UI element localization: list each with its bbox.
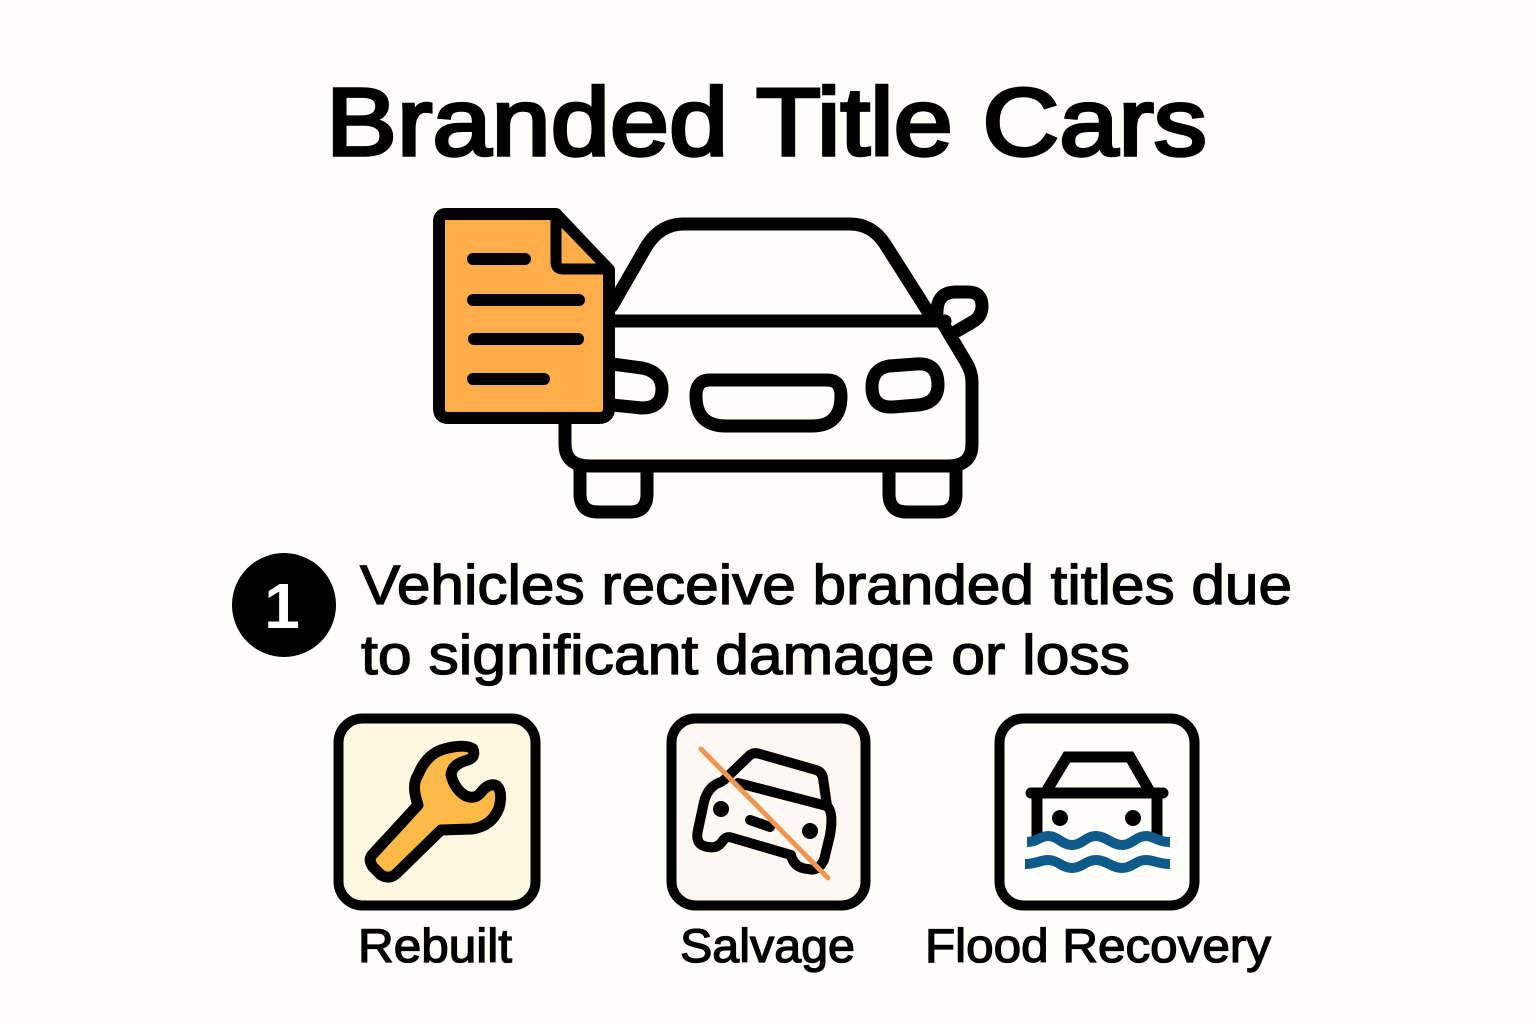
label: rebuilt: Rebuilt [358,919,512,972]
illustration: car with title document [439,214,982,512]
label: salvage: Salvage [680,919,855,972]
icon frame: flood recovery [1000,718,1194,906]
icon: car front view [565,224,982,512]
wheels [580,468,647,512]
step number badge [232,553,336,657]
panel: rebuilt [338,718,536,972]
icon frame: rebuilt [338,718,536,906]
mirror [937,292,982,331]
label: flood recovery: Flood Recovery [925,919,1272,972]
description text: Vehicles receive branded titles due [360,553,1292,616]
water waves [1025,836,1170,868]
panel: flood recovery [925,718,1272,972]
orange strike-through [701,749,828,878]
title: Branded Title Cars [326,69,1207,176]
description text [360,553,1292,686]
grille [696,380,841,426]
wrecked car headlights [713,801,818,839]
step number badge: 1 [264,570,300,642]
icon frame: salvage [672,718,866,906]
icon: flooded car [1031,757,1163,836]
icon: wrench [370,746,501,877]
description text: to significant damage or loss [361,623,1130,686]
left headlight [612,364,662,408]
right headlight [872,364,938,407]
icon: title document [439,214,609,418]
icon: wrecked car [697,753,831,870]
panel: salvage [672,718,866,972]
flooded car headlights [1052,810,1141,826]
